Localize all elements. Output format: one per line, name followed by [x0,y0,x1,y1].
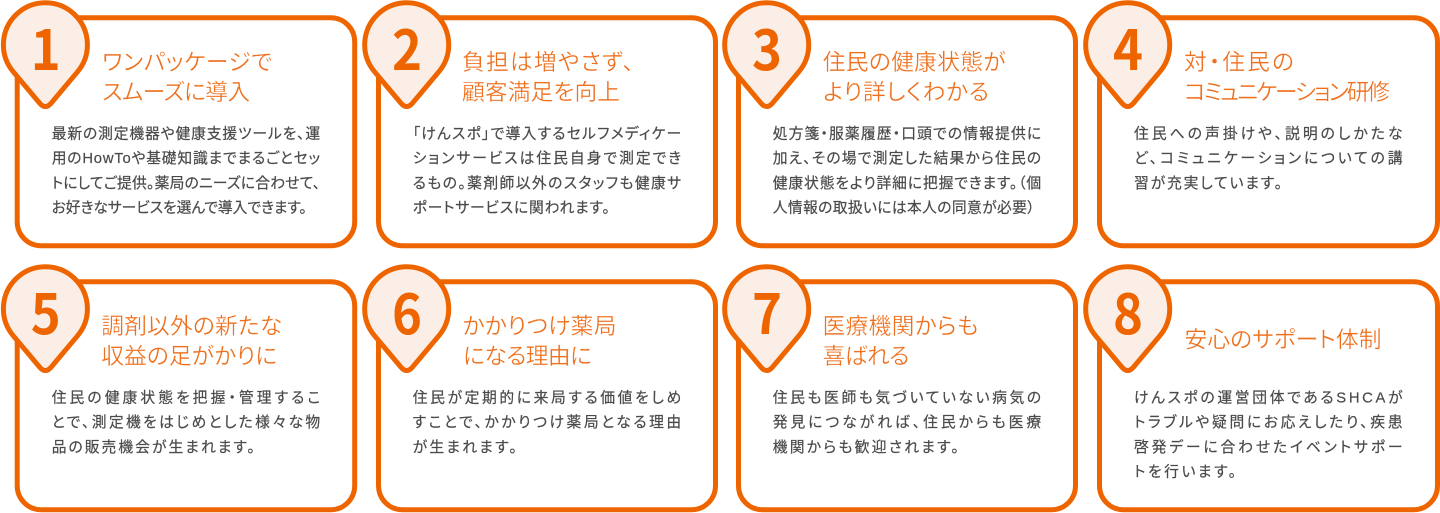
number 7: 7 [752,270,782,350]
body text: とで、測定機をはじめとした様々な物 [52,414,320,431]
body text: ポートサービスに関われます。 [413,199,610,216]
card frame [738,282,1076,510]
heading [462,49,634,105]
body text: 住民も医師も気づいていない病気の [773,390,1041,407]
body text: 「けんスポ」で導入するセルフメディケー [413,125,681,143]
heading: 安心のサポート体制 [1184,326,1382,352]
card frame [1100,282,1438,510]
body text: 住民への声掛けや、説明のしかたな [1134,125,1402,143]
heading [822,313,978,369]
number 4: 4 [1113,6,1143,86]
heading [462,313,616,369]
body text: 品の販売機会が生まれます。 [52,439,255,456]
panel: 4 communication training [1086,3,1438,246]
heading: 収益の足がかりに [101,343,277,369]
number 3: 3 [752,6,782,86]
icon: number pin 1 [3,3,87,107]
heading [823,49,1006,105]
panel: 2 no extra burden [365,3,716,246]
body text [1134,390,1403,480]
icon: number pin 6 [365,267,449,371]
panel: 7 welcomed by medical institutions [725,267,1076,510]
panel: 1 package [3,3,355,246]
heading: 医療機関からも [822,313,978,339]
heading: 住民の健康状態が [823,49,1006,75]
panel: 5 new revenue [3,267,355,510]
body text: 加え、その場で測定した結果から住民の [773,150,1041,167]
number 8: 8 [1113,270,1143,350]
icon: number pin 4 [1086,3,1170,107]
heading: 対・住民の [1184,49,1294,75]
number 1: 1 [31,6,61,86]
card frame [17,282,355,510]
body text [773,390,1041,456]
panel: 6 family pharmacy [365,267,716,510]
body text [52,126,320,216]
body text [52,389,320,456]
heading [102,49,272,105]
body text: 処方箋・服薬履歴・口頭での情報提供に [773,126,1041,143]
heading: になる理由に [463,343,592,369]
body text: 健康状態をより詳細に把握できます。（個 [773,175,1041,192]
card frame [17,18,355,246]
body text: 用のHowToや基礎知識までまるごとセッ [52,150,320,167]
heading: コミュニケーション研修 [1184,79,1390,105]
body text: トを行います。 [1134,463,1236,480]
heading: 顧客満足を向上 [462,79,620,105]
panel: 8 support [1086,267,1438,510]
body text: お好きなサービスを選んで導入できます。 [52,199,307,216]
icon: number pin 8 [1086,267,1170,371]
body text: 機関からも歓迎されます。 [773,439,959,456]
body text: 住民が定期的に来局する価値をしめ [413,390,681,407]
heading: ワンパッケージで [102,49,272,75]
body text [773,126,1041,216]
body text: 習が充実しています。 [1134,175,1282,192]
icon: number pin 3 [725,3,809,107]
body text: 最新の測定機器や健康支援ツールを、運 [52,126,320,143]
number 2: 2 [392,6,422,86]
body text: ションサービスは住民自身で測定でき [413,150,681,167]
card frame [738,18,1076,246]
number 6: 6 [392,270,422,350]
heading: 喜ばれる [822,343,910,369]
body text: ど、コミュニケーションについての講 [1134,150,1403,167]
body text: トラブルや疑問にお応えしたり、疾患 [1134,413,1403,431]
icon: number pin 7 [725,267,809,371]
icon: number pin 2 [365,3,449,107]
heading: 調剤以外の新たな [101,313,282,339]
body text [413,390,681,456]
body text: トにしてご提供。薬局のニーズに合わせて、 [52,175,320,192]
body text: 発見につながれば、住民からも医療 [773,414,1041,431]
number 5: 5 [31,270,61,350]
heading: 負担は増やさず、 [462,49,634,75]
body text: 人情報の取扱いには本人の同意が必要） [773,199,1035,216]
panel: 3 residents' health [725,3,1076,246]
body text: るもの。薬剤師以外のスタッフも健康サ [413,175,681,192]
body text: 啓発デーに合わせたイベントサポー [1134,438,1402,456]
card frame [378,18,716,246]
icon: number pin 5 [3,267,87,371]
heading: スムーズに導入 [102,79,250,105]
card frame [378,282,716,510]
card frame [1100,18,1438,246]
heading [101,313,282,369]
heading [1184,49,1390,105]
body text: が生まれます。 [413,439,517,456]
heading: より詳しくわかる [823,79,989,105]
body text: 住民の健康状態を把握・管理するこ [52,389,320,407]
body text: けんスポの運営団体であるSHCAが [1134,390,1403,407]
body text [1134,125,1403,192]
body text: すことで、かかりつけ薬局となる理由 [413,414,681,431]
body text [413,125,681,216]
heading: かかりつけ薬局 [462,313,616,339]
